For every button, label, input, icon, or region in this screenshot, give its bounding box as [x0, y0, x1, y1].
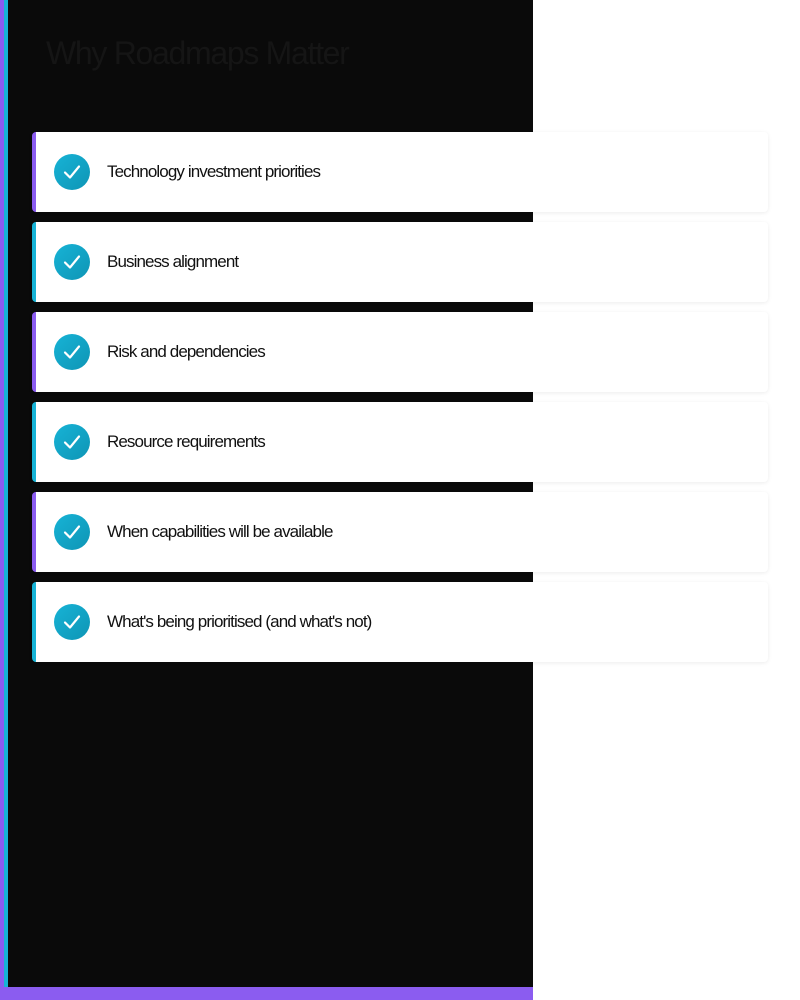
card 2: Business alignment	[107, 252, 238, 271]
card 4	[32, 402, 768, 482]
card 2	[32, 222, 768, 302]
card 4: Resource requirements	[107, 432, 265, 451]
card 5	[32, 492, 768, 572]
card 3	[32, 312, 768, 392]
bottom bar	[0, 987, 533, 1000]
card 5: When capabilities will be available	[107, 522, 333, 541]
card 1: Technology investment priorities	[107, 162, 320, 181]
title: Why Roadmaps Matter	[46, 35, 349, 71]
dark panel	[0, 0, 533, 987]
card 3: Risk and dependencies	[107, 342, 265, 361]
card 6: What's being prioritised (and what's not)	[107, 612, 371, 631]
left accent bar	[0, 0, 4, 987]
card 6	[32, 582, 768, 662]
card 1	[32, 132, 768, 212]
